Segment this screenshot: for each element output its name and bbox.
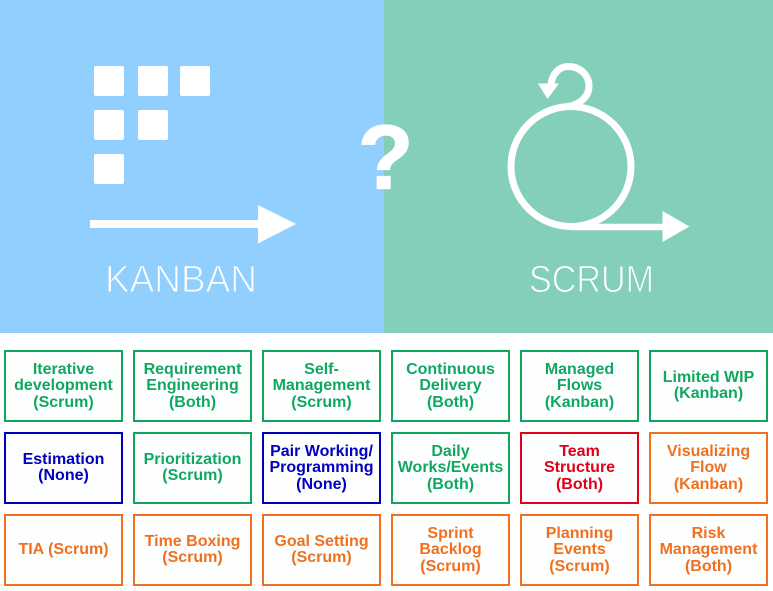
box: Self-Management — [262, 350, 381, 422]
box: Continuous Delivery: (Both) — [427, 394, 474, 410]
panel: scrum background — [384, 0, 773, 333]
question mark: ? — [358, 108, 413, 208]
box: Requirement Engineering: Engineering — [146, 377, 239, 394]
box: Prioritization: (Scrum) — [162, 467, 223, 484]
box: Prioritization — [133, 432, 252, 504]
box: Time Boxing: Time Boxing — [145, 533, 240, 550]
box: Planning Events: Events — [553, 541, 606, 558]
box: Visualizing Flow — [649, 432, 768, 504]
box: Team Structure — [520, 432, 639, 504]
box: Iterative development — [4, 350, 123, 422]
box: Limited WIP: (Kanban) — [674, 385, 743, 402]
box: Estimation — [4, 432, 123, 504]
box: Self-Management: Self- — [304, 360, 339, 378]
box: Daily Works/Events: Works/Events — [398, 459, 503, 476]
box: Pair Working/Programming — [262, 432, 381, 504]
box: Daily Works/Events: (Both) — [427, 476, 474, 492]
box: Goal Setting: (Scrum) — [291, 549, 352, 566]
box: Team Structure: (Both) — [556, 476, 603, 492]
box: Team Structure: Structure — [544, 459, 615, 476]
box: Prioritization: Prioritization — [144, 451, 241, 468]
box: Requirement Engineering: (Both) — [169, 394, 216, 410]
box: Risk Management: (Both) — [685, 558, 732, 574]
box: Pair Working/Programming: Pair Working/ — [270, 442, 373, 460]
box: Time Boxing — [133, 514, 252, 586]
box: Pair Working/Programming: Programming — [269, 459, 374, 476]
box: Time Boxing: (Scrum) — [162, 549, 223, 566]
box: Risk Management: Management — [660, 541, 757, 558]
box: Visualizing Flow: Visualizing — [667, 442, 750, 460]
box: Requirement Engineering — [133, 350, 252, 422]
box: TIA: TIA (Scrum) — [18, 541, 109, 558]
box: Sprint Backlog: Sprint — [427, 524, 474, 542]
box: Planning Events: Planning — [546, 524, 613, 542]
box: Managed Flows: (Kanban) — [545, 394, 614, 410]
box: Goal Setting — [262, 514, 381, 586]
icon: kanban cards — [94, 66, 210, 184]
box: Planning Events: (Scrum) — [549, 558, 610, 574]
box: Managed Flows: Managed — [545, 360, 614, 378]
box: Daily Works/Events — [391, 432, 510, 504]
box: Risk Management — [649, 514, 768, 586]
heading: SCRUM: SCRUM — [529, 259, 654, 301]
box: Limited WIP — [649, 350, 768, 422]
heading: KANBAN: KANBAN — [105, 259, 257, 301]
box: Requirement Engineering: Requirement — [144, 360, 241, 378]
box: Estimation: Estimation — [23, 451, 104, 468]
box: Continuous Delivery: Delivery — [419, 377, 482, 394]
box: Limited WIP: Limited WIP — [663, 369, 754, 386]
icon: scrum sprint cycle — [511, 66, 690, 242]
box: TIA — [4, 514, 123, 586]
box: Sprint Backlog — [391, 514, 510, 586]
box: Managed Flows: Flows — [557, 377, 602, 394]
box: Continuous Delivery — [391, 350, 510, 422]
box: Self-Management: (Scrum) — [291, 394, 352, 410]
box: Iterative development: Iterative — [33, 360, 94, 378]
box: Iterative development: development — [14, 377, 113, 394]
box: Goal Setting: Goal Setting — [274, 533, 369, 550]
box: Managed Flows — [520, 350, 639, 422]
hero comparison panels — [0, 0, 773, 333]
box: Risk Management: Risk — [692, 524, 725, 542]
box: Planning Events — [520, 514, 639, 586]
box: Team Structure: Team — [559, 442, 600, 460]
box: Pair Working/Programming: (None) — [296, 476, 347, 492]
panel: kanban background — [0, 0, 384, 333]
box: Estimation: (None) — [38, 467, 89, 484]
box: Continuous Delivery: Continuous — [406, 360, 495, 378]
box: Visualizing Flow: (Kanban) — [674, 476, 743, 492]
box: Sprint Backlog: Backlog — [419, 541, 482, 558]
box: Iterative development: (Scrum) — [33, 394, 94, 410]
box: Self-Management: Management — [273, 377, 370, 394]
arrow: kanban flow — [90, 205, 296, 244]
box: Sprint Backlog: (Scrum) — [420, 558, 481, 574]
box: Daily Works/Events: Daily — [431, 442, 470, 460]
box: Visualizing Flow: Flow — [690, 459, 727, 476]
